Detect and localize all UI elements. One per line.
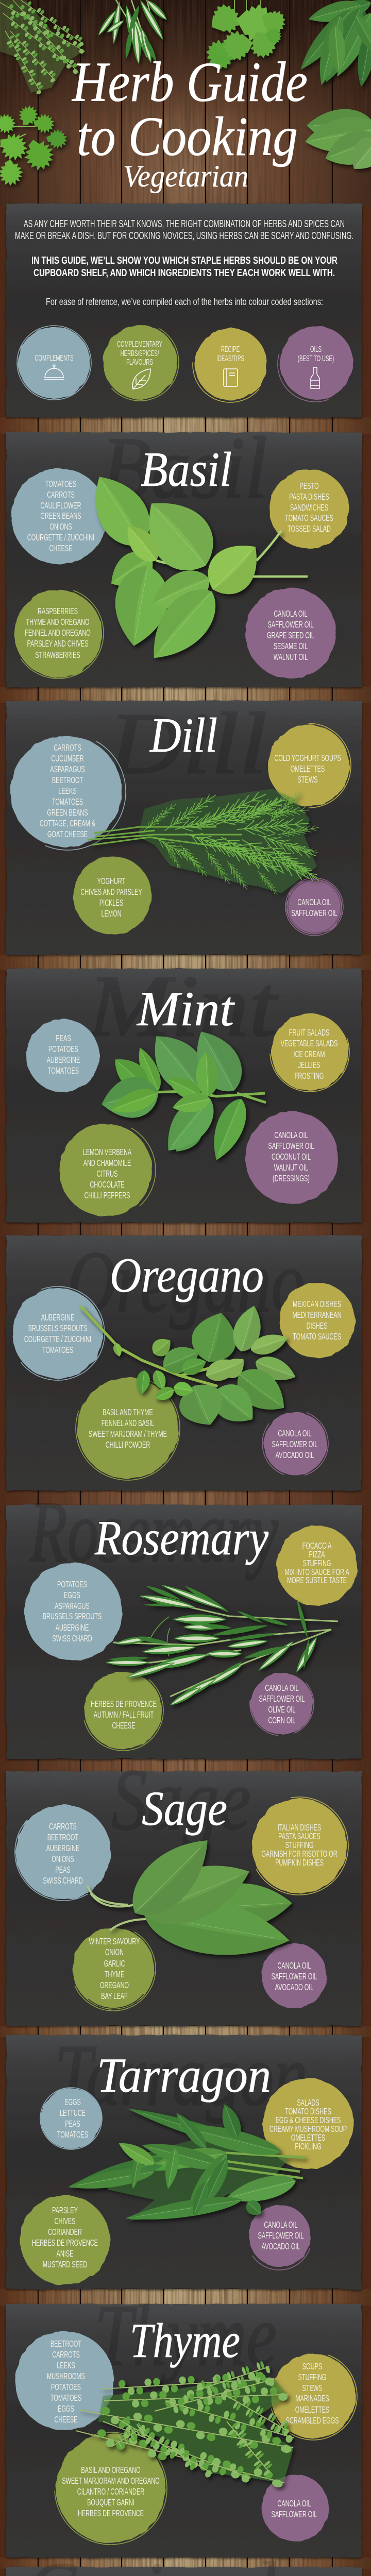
complements: rosemary: POTATOES bbox=[57, 1580, 87, 1590]
oils: thyme bbox=[262, 2475, 329, 2541]
complements: tarragon: EGGS bbox=[64, 2098, 81, 2108]
heading: dill: Dill bbox=[149, 708, 217, 762]
oils: sage: AVOCADO OIL bbox=[275, 1983, 313, 1993]
herbs: basil: STRAWBERRIES bbox=[35, 651, 80, 660]
herbs: sage: ONION bbox=[105, 1948, 124, 1958]
recipes: rosemary: STUFFING bbox=[303, 1559, 331, 1569]
intro text bbox=[15, 218, 353, 242]
recipes: dill: COLD YOGHURT SOUPS bbox=[274, 754, 341, 764]
herbs: thyme bbox=[39, 2416, 183, 2561]
complements: dill: COTTAGE, CREAM & bbox=[40, 819, 95, 829]
herbs: rosemary: AUTUMN / FALL FRUIT bbox=[94, 1710, 154, 1720]
complements: thyme: LEEKS bbox=[57, 2361, 75, 2371]
recipes: mint: FROSTING bbox=[295, 1072, 324, 1081]
oils: basil: CANOLA OIL bbox=[274, 609, 308, 619]
herbs: tarragon: HERBES DE PROVENCE bbox=[32, 2239, 98, 2248]
heading: basil: Basil bbox=[141, 442, 232, 497]
complements: basil: CAULIFLOWER bbox=[40, 501, 81, 511]
recipes: dill: OMELETTES bbox=[291, 765, 325, 774]
recipes: basil: TOMATO SAUCES bbox=[285, 514, 333, 523]
herbs: dill: CHIVES AND PARSLEY bbox=[80, 888, 142, 897]
oils: mint: CANOLA OIL bbox=[274, 1131, 308, 1141]
herbs: rosemary: CHEESE bbox=[112, 1721, 136, 1731]
panel: dill: Dill bbox=[108, 695, 267, 792]
herbs: tarragon: PARSLEY bbox=[52, 2206, 78, 2216]
recipes: rosemary: MORE SUBTLE TASTE bbox=[287, 1576, 347, 1586]
complements: mint bbox=[26, 1019, 99, 1092]
herbs: sage: WINTER SAVOURY bbox=[89, 1937, 140, 1947]
recipes: sage: GARNISH FOR RISOTTO OR bbox=[261, 1850, 338, 1859]
herbs: sage: BAY LEAF bbox=[101, 1992, 128, 2002]
panel: dill bbox=[0, 695, 362, 955]
complements: sage: AUBERGINE bbox=[46, 1844, 79, 1854]
herbs: tarragon: MUSTARD SEED bbox=[43, 2260, 87, 2270]
herb: tarragon top right bbox=[294, 0, 371, 88]
oils: thyme: SAFFLOWER OIL bbox=[272, 2510, 317, 2520]
complements: rosemary bbox=[24, 1563, 122, 1660]
herbs: thyme: SWEET MARJORAM AND OREGANO bbox=[62, 2477, 160, 2486]
recipes: tarragon bbox=[263, 2078, 353, 2169]
heading: thyme: Thyme bbox=[130, 2313, 240, 2368]
oils: oregano bbox=[253, 1401, 338, 1486]
complements: thyme: CARROTS bbox=[52, 2350, 80, 2360]
recipes: mint: ICE CREAM bbox=[294, 1050, 325, 1060]
oils: thyme: CANOLA OIL bbox=[277, 2499, 311, 2509]
icon: leaf bbox=[132, 369, 150, 389]
complements: tarragon: TOMATOES bbox=[57, 2130, 88, 2140]
complements: rosemary: EGGS bbox=[64, 1591, 80, 1601]
complements: dill: ASPARAGUS bbox=[50, 765, 85, 775]
oils: oregano: CANOLA OIL bbox=[278, 1429, 312, 1439]
complements: dill: GREEN BEANS bbox=[47, 808, 88, 818]
legend: recipe ideas: IDEAS/TIPS bbox=[216, 354, 244, 363]
heading: oregano: Oregano bbox=[110, 1248, 264, 1302]
herbs: mint: CITRUS bbox=[97, 1170, 117, 1179]
recipes: thyme: STEWS bbox=[302, 2384, 323, 2394]
oils: sage: CANOLA OIL bbox=[277, 1961, 311, 1971]
herbs: thyme: BOUQUET GARNI bbox=[87, 2498, 134, 2508]
complements: basil: TOMATOES bbox=[45, 480, 76, 489]
herbs: oregano: FENNEL AND BASIL bbox=[102, 1419, 154, 1429]
panel: basil: Basil bbox=[102, 419, 267, 516]
recipes: mint bbox=[259, 1001, 361, 1103]
complements: dill: BEETROOT bbox=[52, 776, 83, 786]
herbs: thyme: CILANTRO / CORIANDER bbox=[77, 2487, 144, 2497]
herb image: basil bbox=[79, 464, 308, 672]
oils: rosemary: CORN OIL bbox=[268, 1716, 296, 1726]
herbs: rosemary: HERBES DE PROVENCE bbox=[91, 1700, 157, 1709]
herb image: sage bbox=[88, 1824, 294, 1968]
herb: rosemary top bbox=[96, 0, 170, 64]
title: Vegetarian bbox=[123, 159, 248, 193]
complements: thyme: EGGS bbox=[58, 2404, 74, 2414]
recipes: tarragon: EGG & CHEESE DISHES bbox=[276, 2116, 341, 2126]
complements: rosemary: SWISS CHARD bbox=[52, 1634, 92, 1644]
oils: basil bbox=[245, 588, 336, 679]
complements: tarragon: LETTUCE bbox=[60, 2109, 86, 2119]
complements: sage: CARROTS bbox=[49, 1822, 77, 1832]
herbs: oregano: SWEET MARJORAM / THYME bbox=[89, 1430, 167, 1439]
herb: thyme top left bbox=[0, 0, 87, 96]
complements: sage: ONIONS bbox=[52, 1855, 74, 1865]
complements: basil: CHEESE bbox=[49, 544, 73, 554]
herbs: basil: RASPBERRIES bbox=[38, 607, 78, 617]
herbs: thyme: HERBES DE PROVENCE bbox=[78, 2509, 144, 2519]
herbs: mint: CHOCOLATE bbox=[90, 1180, 125, 1190]
panel: mint bbox=[6, 958, 362, 1236]
intro bold text bbox=[31, 255, 338, 279]
recipes: thyme: SCRAMBLED EGGS bbox=[286, 2416, 339, 2426]
recipes: tarragon: PICKLING bbox=[295, 2142, 322, 2152]
herbs: tarragon: CORIANDER bbox=[48, 2228, 82, 2238]
oils: basil: SAFFLOWER OIL bbox=[268, 620, 313, 630]
herbs: oregano: CHILLI POWDER bbox=[106, 1440, 150, 1450]
oils: mint: (DRESSINGS) bbox=[273, 1174, 310, 1184]
recipes: tarragon: OMELETTES bbox=[291, 2133, 325, 2143]
oils: sage bbox=[262, 1943, 327, 2008]
complements: oregano: AUBERGINE bbox=[41, 1313, 74, 1323]
herbs: sage bbox=[56, 1911, 171, 2026]
panel: sage bbox=[0, 1751, 362, 2026]
complements: sage: BEETROOT bbox=[47, 1833, 78, 1843]
legend: complementary herbs bbox=[88, 310, 193, 415]
herbs: dill: PICKLES bbox=[99, 899, 123, 908]
oils: mint bbox=[245, 1111, 338, 1204]
oils: mint: SAFFLOWER OIL bbox=[268, 1142, 314, 1151]
recipes: basil: PESTO bbox=[300, 482, 318, 492]
panel: rosemary: Rosemary bbox=[29, 1483, 278, 1580]
complements: dill: CUCUMBER bbox=[51, 754, 84, 764]
oils: tarragon: AVOCADO OIL bbox=[262, 2242, 300, 2252]
complements: oregano: BRUSSELS SPROUTS bbox=[28, 1324, 87, 1334]
herb image: dill bbox=[88, 787, 322, 896]
oils: oregano: SAFFLOWER OIL bbox=[272, 1440, 317, 1450]
herbs: oregano bbox=[61, 1362, 194, 1495]
recipes: rosemary: MIX INTO SAUCE FOR A bbox=[284, 1568, 349, 1578]
oils: dill: CANOLA OIL bbox=[297, 898, 331, 908]
legend: complementary herbs: HERBS/SPICES/ bbox=[121, 349, 159, 358]
complements: dill bbox=[0, 713, 147, 871]
oils: basil: WALNUT OIL bbox=[274, 653, 308, 663]
complements: thyme: TOMATOES bbox=[50, 2394, 81, 2403]
heading: mint: Mint bbox=[136, 981, 235, 1036]
herbs: tarragon: ANISE bbox=[57, 2249, 74, 2259]
recipes: oregano: MEDITERRANEAN bbox=[292, 1311, 342, 1320]
recipes: oregano: MEXICAN DISHES bbox=[293, 1300, 341, 1310]
panel: sage: Sage bbox=[111, 1751, 251, 1848]
complements: oregano: TOMATOES bbox=[42, 1346, 73, 1355]
herbs: mint bbox=[41, 1104, 173, 1236]
recipes: thyme: SOUPS bbox=[302, 2362, 322, 2372]
recipes: basil: PASTA DISHES bbox=[289, 493, 329, 502]
recipes: oregano bbox=[280, 1283, 355, 1358]
recipes: sage: PASTA SAUCES bbox=[278, 1832, 321, 1842]
complements: basil: COURGETTE / ZUCCHINI bbox=[27, 533, 94, 543]
oils: dill bbox=[285, 878, 343, 936]
herbs: sage: GARLIC bbox=[104, 1959, 125, 1969]
panel: tarragon bbox=[6, 2027, 362, 2289]
recipes: tarragon: TOMATO DISHES bbox=[285, 2107, 331, 2117]
recipes: sage: STUFFING bbox=[285, 1841, 313, 1851]
legend: oils: OILS bbox=[310, 345, 322, 354]
title: Herb Guide bbox=[71, 50, 308, 113]
oils: dill: SAFFLOWER OIL bbox=[292, 909, 337, 919]
recipes: oregano: DISHES bbox=[307, 1321, 327, 1331]
panel: intro bbox=[6, 204, 364, 418]
herbs: dill: YOGHURT bbox=[97, 877, 125, 887]
complements: mint: PEAS bbox=[56, 1034, 71, 1044]
recipes: rosemary: FOCACCIA bbox=[302, 1541, 331, 1551]
complements: oregano bbox=[0, 1273, 118, 1394]
complements: thyme bbox=[15, 2331, 114, 2430]
complements: basil: GREEN BEANS bbox=[40, 512, 81, 521]
panel: thyme bbox=[6, 2287, 369, 2561]
complements: rosemary: BRUSSELS SPROUTS bbox=[43, 1612, 102, 1622]
recipes: basil: SANDWICHES bbox=[290, 503, 328, 513]
complements: oregano: COURGETTE / ZUCCHINI bbox=[24, 1335, 91, 1345]
oils: tarragon bbox=[238, 2196, 321, 2279]
complements: mint: AUBERGINE bbox=[47, 1056, 80, 1065]
herbs: mint: AND CHAMOMILE bbox=[83, 1159, 131, 1168]
panel: thyme: Thyme bbox=[95, 2287, 277, 2384]
icon: book bbox=[224, 369, 238, 386]
recipes: dill bbox=[266, 723, 351, 808]
herbs: rosemary bbox=[66, 1654, 180, 1767]
complements: mint: POTATOES bbox=[48, 1045, 78, 1055]
recipes: dill: STEWS bbox=[298, 775, 318, 785]
panel: oregano: Oregano bbox=[68, 1233, 305, 1330]
complements: mint: TOMATOES bbox=[48, 1066, 79, 1076]
recipes: rosemary bbox=[277, 1526, 357, 1606]
complements: rosemary: AUBERGINE bbox=[56, 1623, 89, 1633]
complements: basil bbox=[11, 468, 107, 564]
herbs: thyme: BASIL AND OREGANO bbox=[81, 2466, 141, 2476]
herbs: sage: OREGANO bbox=[100, 1981, 129, 1991]
recipes: sage bbox=[243, 1789, 356, 1903]
herbs: dill: LEMON bbox=[101, 909, 122, 919]
oils: rosemary bbox=[237, 1659, 327, 1749]
oils: oregano: AVOCADO OIL bbox=[276, 1451, 314, 1461]
oils: sage: SAFFLOWER OIL bbox=[272, 1972, 317, 1982]
oils: tarragon: SAFFLOWER OIL bbox=[258, 2231, 303, 2241]
recipes: thyme bbox=[257, 2340, 369, 2452]
herbs: basil: PARSLEY AND CHIVES bbox=[27, 639, 89, 649]
complements: thyme: POTATOES bbox=[51, 2383, 81, 2393]
complements: thyme: MUSHROOMS bbox=[47, 2372, 85, 2382]
legend: oils: (BEST TO USE) bbox=[298, 354, 334, 363]
recipes: rosemary: PIZZA bbox=[309, 1550, 325, 1560]
herb: sage right bbox=[302, 107, 371, 178]
recipes: thyme: STUFFING bbox=[298, 2373, 326, 2383]
complements: sage: SWISS CHARD bbox=[43, 1876, 83, 1886]
recipes: mint: JELLIES bbox=[298, 1061, 320, 1071]
legend: complementary herbs: FLAVOURS bbox=[126, 358, 153, 367]
recipes: thyme: OMELETTES bbox=[295, 2405, 329, 2415]
panel: oregano bbox=[0, 1233, 362, 1495]
complements: rosemary: ASPARAGUS bbox=[55, 1602, 90, 1612]
panel: mint: Mint bbox=[87, 958, 279, 1055]
recipes: basil bbox=[269, 469, 349, 549]
title bbox=[71, 50, 308, 193]
oils: basil: SESAME OIL bbox=[274, 642, 308, 652]
heading: tarragon: Tarragon bbox=[97, 2048, 271, 2103]
herbs: tarragon bbox=[20, 2195, 110, 2285]
recipes: sage: PUMPKIN DISHES bbox=[275, 1858, 324, 1868]
oils: mint: COCONUT OIL bbox=[272, 1153, 311, 1162]
oils: mint: WALNUT OIL bbox=[274, 1163, 308, 1173]
recipes: sage: ITALIAN DISHES bbox=[278, 1823, 321, 1833]
recipes: tarragon: SALADS bbox=[297, 2098, 319, 2108]
herb image: thyme bbox=[74, 2359, 296, 2490]
recipes: tarragon: CREAMY MUSHROOM SOUP bbox=[269, 2125, 347, 2134]
oils: rosemary: SAFFLOWER OIL bbox=[259, 1694, 305, 1704]
recipes: basil: TOSSED SALAD bbox=[288, 524, 331, 534]
complements: sage: PEAS bbox=[55, 1866, 71, 1875]
legend: complementary herbs: COMPLEMENTARY bbox=[117, 340, 162, 349]
herb: coriander top bbox=[204, 0, 289, 72]
complements: basil: CARROTS bbox=[47, 490, 75, 500]
herb image: mint bbox=[97, 1022, 266, 1165]
oils: tarragon: CANOLA OIL bbox=[264, 2221, 298, 2230]
complements: dill: LEEKS bbox=[58, 787, 77, 796]
legend: oils bbox=[267, 316, 364, 413]
herb: parsley left bbox=[0, 102, 69, 185]
heading: rosemary: Rosemary bbox=[94, 1511, 269, 1565]
herb image: rosemary bbox=[106, 1582, 338, 1708]
complements: dill: TOMATOES bbox=[52, 798, 83, 807]
recipes: mint: FRUIT SALADS bbox=[289, 1028, 329, 1038]
legend: complements bbox=[17, 326, 91, 400]
panel: basil bbox=[0, 419, 362, 691]
complements: sage bbox=[0, 1786, 129, 1918]
oils: basil: GRAPE SEED OIL bbox=[267, 631, 314, 641]
icon: bottle bbox=[311, 367, 319, 388]
recipes: thyme: MARINADES bbox=[295, 2394, 329, 2404]
herb image: oregano bbox=[81, 1302, 299, 1433]
complements: thyme: CHEESE bbox=[54, 2415, 78, 2425]
legend: recipe ideas: RECIPE bbox=[221, 345, 240, 354]
herbs: basil: FENNEL AND OREGANO bbox=[25, 629, 91, 638]
herbs: mint: LEMON VERBENA bbox=[83, 1148, 131, 1158]
complements: tarragon: PEAS bbox=[65, 2120, 80, 2129]
oils: rosemary: OLIVE OIL bbox=[268, 1705, 296, 1715]
herbs: basil: THYME AND OREGANO bbox=[26, 618, 90, 628]
heading: sage: Sage bbox=[142, 1781, 227, 1836]
complements: basil: ONIONS bbox=[49, 522, 72, 532]
panel: rosemary bbox=[6, 1483, 362, 1767]
herb image: tarragon bbox=[66, 2102, 306, 2226]
complements: dill: GOAT CHEESE bbox=[47, 830, 88, 840]
icon: cloche bbox=[44, 365, 64, 380]
herbs: oregano: BASIL AND THYME bbox=[103, 1408, 153, 1418]
recipes: oregano: TOMATO SAUCES bbox=[293, 1332, 341, 1342]
oils: rosemary: CANOLA OIL bbox=[265, 1684, 299, 1693]
herbs: mint: CHILLI PEPPERS bbox=[85, 1191, 130, 1201]
herbs: sage: THYME bbox=[105, 1970, 124, 1980]
herbs: dill bbox=[73, 856, 151, 935]
title: to Cooking bbox=[77, 106, 298, 167]
complements: tarragon bbox=[40, 2088, 102, 2149]
complements: dill: CARROTS bbox=[54, 743, 81, 753]
herbs: basil bbox=[0, 575, 116, 691]
recipes: mint: VEGETABLE SALADS bbox=[281, 1039, 338, 1049]
complements: thyme: BEETROOT bbox=[50, 2340, 81, 2349]
legend: complements: COMPLEMENTS bbox=[35, 353, 74, 363]
herbs: tarragon: CHIVES bbox=[55, 2217, 75, 2227]
legend: recipe ideas bbox=[177, 312, 283, 418]
